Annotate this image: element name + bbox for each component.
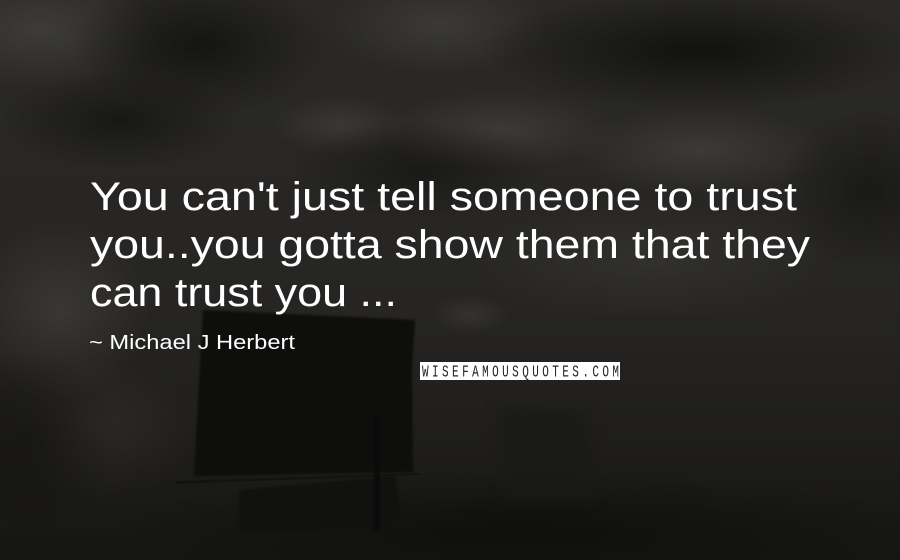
watermark: wisefamousquotes.com: WISEFAMOUSQUOTES.COM <box>422 363 619 382</box>
quote text <box>90 175 810 315</box>
illustration: main longship silhouette <box>176 310 425 530</box>
quote text: can trust you ... <box>90 271 397 315</box>
quote text: you..you gotta show them that they <box>90 223 810 267</box>
illustration: distant ship silhouette <box>498 407 597 500</box>
quote text: You can't just tell someone to trust <box>90 175 797 219</box>
author attribution: ~ Michael J Herbert <box>89 332 296 354</box>
